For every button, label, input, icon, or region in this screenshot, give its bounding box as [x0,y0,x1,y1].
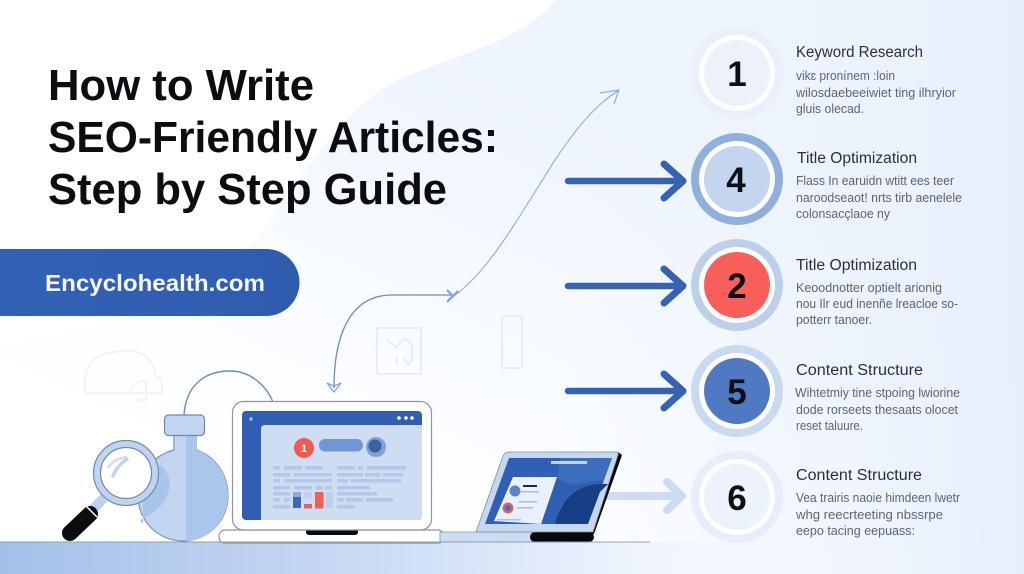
ground line [0,542,590,543]
step 6 badge: 6 [727,479,747,518]
ghost icon: rectangle [502,316,522,368]
step 6 text: Content Structure [796,467,922,484]
step 2 text: potterr tanoer. [796,313,872,327]
arrow to step 5 [568,374,683,408]
step 5 text: Content Structure [796,362,923,379]
icon: large laptop [219,402,444,543]
title [48,62,498,214]
step 5 badge: 5 [727,373,747,412]
step 4 badge [691,133,783,225]
step 2 text: nou Ilr eud inenñe lreacloe so- [796,297,958,311]
step 5 text [795,362,960,433]
step 6 text: whg reecrteeting nbssrpe [795,508,943,522]
icon: magnifying glass [70,440,158,533]
small laptop screen [476,452,622,534]
screen bar chart [293,492,333,508]
step 1 text: vikɛ pronínem :loin [796,69,895,83]
laptop base [219,530,444,543]
step 6 text: Vea trairis naoie himdeen lwetr [796,491,960,505]
step 1 badge [691,27,783,119]
step 1 text: Keyword Research [796,44,923,61]
step 2 text [796,257,958,327]
ghost icon: cloud [85,351,162,400]
step 6 badge [691,451,783,543]
arrow to step 2 [568,269,683,303]
step 5 text: Wihtetmiy tine stpoing lwiorine [795,386,960,400]
icon: small laptop [440,452,650,542]
step 4 text: Flass In earuidn wtitt ees teer [796,174,954,188]
step 6 text: eepo tacing eepuass: [796,524,915,538]
icon: flask [138,371,273,541]
small laptop base [440,532,650,542]
step 1 [691,27,956,119]
laptop body [232,402,432,530]
arrow to step 4 [568,164,683,198]
step 2 text: Keoodnotter optielt arionig [796,281,942,295]
step 1 badge: 1 [727,55,747,94]
step 5 text: dode rorseets thesaats olocet [796,403,959,417]
step 1 text: wilosdaebeeiwiet ting ilhryior [795,86,956,100]
step 2 text: Title Optimization [796,257,917,274]
arrow to step 6 [600,482,682,510]
step 1 text: gluis olecad. [796,102,864,116]
step 5 text: reset taluure. [796,419,863,433]
curved arrow to laptop [327,290,453,392]
step 5 badge [691,345,783,437]
step 6 [691,451,960,543]
website banner pill [0,249,300,316]
step 2 [691,239,958,331]
step 4 text: colonsacçlaoe ny [796,207,891,221]
step 4 badge: 4 [726,161,746,200]
step 4 text: naroodseaot! nrts tirb aenelele [796,191,962,205]
laptop screen [242,411,422,520]
step 4 [691,133,962,225]
title: How to Write [48,62,314,110]
website banner pill: Encyclohealth.com [45,270,265,296]
screen text lines [273,466,406,508]
small laptop document [494,477,557,524]
step 5 [691,345,960,437]
step 4 text [796,150,962,221]
step 4 text: Title Optimization [797,150,917,167]
step 1 text [795,44,956,116]
title: Step by Step Guide [48,166,447,214]
curved arrow up to steps [448,90,619,301]
step 2 badge: 2 [727,267,747,306]
title: SEO-Friendly Articles: [48,114,498,162]
laptop screen: 1 [301,443,307,455]
ghost icon: house square [377,328,421,374]
step 6 text [795,467,960,538]
step 2 badge [691,239,783,331]
